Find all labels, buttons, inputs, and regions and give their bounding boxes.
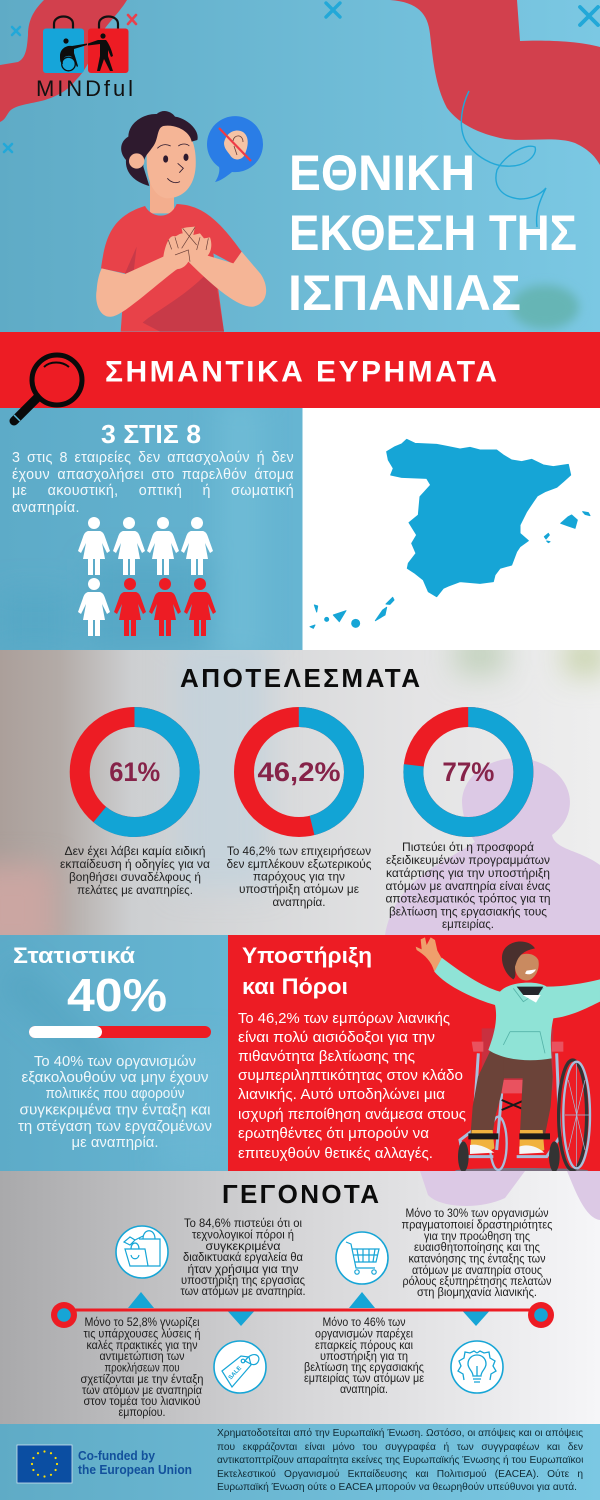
body text: είναι πολύ αισιόδοξοι για την [238,1029,435,1046]
caption: 77% [386,840,551,931]
caption: 46,2%: Το 46,2% των επιχειρήσεων [227,844,371,858]
caption: 77%: αποτελεσματικός τρόπος για τη [386,892,550,906]
decorative purple silhouette [420,1171,600,1220]
shirt [101,204,242,332]
icon: EU flag [17,1445,72,1483]
text: 30% [402,1208,553,1299]
decorative cross marks [4,3,598,152]
head [515,954,539,981]
heading: 3 ΣΤΙΣ 8 [101,419,201,449]
panel: support and resources [228,935,600,1173]
text: 84,6%: συγκεκριμένα [206,1241,281,1253]
body text [12,450,294,522]
disclaimer text: αντικατοπτρίζουν απαραίτητα εκείνες της Ευρωπαϊκής Ένωσης ή του Ευρωπαϊκού [217,1455,583,1466]
body text: πολιτικές που αφορούν [46,1086,184,1102]
disclaimer text: Χρηματοδοτείται από την Ευρωπαϊκή Ένωση. Ωστόσο, οι απόψεις και οι απόψεις [217,1428,583,1439]
co-funded label: Co-funded by [78,1449,155,1463]
text: 52,8%: εμπορίου. [118,1407,166,1419]
small wheels [458,1141,469,1172]
text: 84,6%: των ατόμων με αναπηρία. [180,1286,306,1298]
panel: map of Spain [302,408,600,650]
icon: speech bubble with crossed ear [207,116,263,182]
disclaimer text: Ευρωπαϊκή Ένωση ούτε ο EACEA μπορούν να θεωρηθούν υπεύθυνοι για αυτά. [217,1482,577,1493]
heading [242,943,372,999]
caption: 77%: κατάρτισης για την υποστήριξη [386,866,550,880]
caption: 61%: εκπαίδευση ή οδηγίες για να [60,857,210,871]
decorative curl line [461,91,546,227]
disclaimer text: Εκτελεστικού Οργανισμού Εκπαίδευσης και Πολιτισμού (EACEA). Ούτε η [217,1468,583,1480]
text: 84,6%: διαδικτυακά εργαλεία θα [183,1252,303,1264]
text: 30%: ατόμων με αναπηρία στους [412,1265,542,1277]
heading: και Πόροι [242,974,348,999]
body text: συμπεριληπτικότητας στον κλάδο [238,1067,463,1084]
progress bar [29,1026,211,1038]
panel: key findings banner [0,332,600,408]
body text: πιθανότητα βελτίωσης της [238,1048,415,1065]
text: 52,8%: αντιμετώπιση των [100,1351,185,1363]
disclaimer text [217,1427,583,1497]
text: 46%: υποστήριξη για τη [320,1351,408,1363]
body text: Το 46,2% των εμπόρων λιανικής [238,1010,450,1027]
body text: τη στέγαση των εργαζομένων [18,1119,212,1135]
text: 84,6%: Το 84,6% πιστεύει ότι οι [184,1218,302,1230]
big number: 40% [67,969,167,1021]
shoes [470,1130,544,1153]
text: 52,8%: προκλήσεων που [104,1362,180,1374]
disclaimer text: που εκφράζονται είναι μόνο του συγγραφέα ή των συγγραφέων και δεν [217,1442,583,1452]
text: 30%: Μόνο το 30% των οργανισμών [406,1208,549,1220]
icon: shopping cart [336,1232,388,1284]
title [288,145,577,321]
hand [416,937,442,972]
donut: 46,2% [244,717,354,827]
body text: επιτευχθούν θετικές αλλαγές. [238,1145,433,1162]
eyes and features [163,155,168,163]
caption: 77%: βελτίωση της εργασιακής τους [389,904,547,918]
body text: ερωτηθέντες ότι μπορούν να [238,1125,429,1142]
neck [150,180,174,213]
panel: results [0,635,600,955]
heading: Στατιστικά [13,943,136,968]
ear [129,153,144,169]
caption: 77%: Πιστεύει ότι η προσφορά [402,840,534,854]
body text: συγκεκριμένα την ένταξη και [20,1102,210,1118]
body text: Το 40% των οργανισμών [34,1054,196,1070]
title: ΕΘΝΙΚΗ [289,145,475,201]
caption: 61% [60,844,210,897]
map [310,439,590,628]
banner heading: ΣΗΜΑΝΤΙΚΑ ΕΥΡΗΜΑΤΑ [105,356,497,388]
text: 30%: για την προώθηση της [424,1231,530,1243]
right arm [188,252,266,307]
standing figure [88,33,113,71]
panel: facts timeline [0,1171,600,1424]
text: 46%: επαρκείς πόρους και [315,1340,413,1352]
donut: 61% [80,717,190,827]
text: 52,8%: στον τομέα του λιανικού [84,1396,200,1408]
text: 46%: εμπειρίας των ατόμων με [304,1373,424,1385]
heading: ΓΕΓΟΝΟΤΑ [222,1179,379,1209]
caption: 77%: εμπειρίας. [442,917,494,931]
text: 46% [304,1317,424,1396]
title: ΕΚΘΕΣΗ ΤΗΣ [289,205,577,261]
panel: statistics [0,935,230,1171]
body text: εξακολουθούν να μην έχουν [22,1070,208,1086]
face [147,125,196,198]
body text: έχουν απασχολήσει στο παρελθόν άτομα [12,467,294,483]
body text: ισχυρή πεποίθηση ανάμεσα στους [238,1106,466,1123]
caption: 77%: ατόμων με αναπηρία είναι ένας [386,879,551,893]
icon: sale tag [214,1341,266,1393]
caption: 46,2% [226,844,372,909]
text: 52,8%: τις υπάρχουσες λύσεις ή [84,1328,200,1340]
logo: MINDful [36,16,133,101]
body text: 3 στις 8 εταιρείες δεν απασχολούν ή δεν [12,450,294,466]
pictogram: eight figures, three red [78,517,216,636]
body text: με ακουστική, οπτική ή σωματική [12,483,294,499]
icon: shopping bags [116,1226,168,1278]
caption: 46,2%: δεν εμπλέκουν εξωτερικούς [226,857,372,871]
wheelchair back [482,1028,553,1090]
ground shadow [455,1168,588,1173]
wheelchair figure [60,38,87,71]
text: 46%: οργανισμών παρέχει [315,1328,413,1340]
panel: hero header [0,0,600,332]
body text: αναπηρία. [12,500,80,516]
co-funded label: the European Union [78,1463,192,1477]
red blob: top right [390,0,600,165]
co-funded label [78,1449,192,1477]
text: 84,6%: τεχνολογικοί πόροι ή [192,1230,294,1242]
heading: ΑΠΟΤΕΛΕΣΜΑΤΑ [180,663,420,693]
donut: 61%: 61% [109,757,160,787]
text: 84,6%: υποστήριξη της εργασίας [181,1275,305,1287]
text: 46%: βελτίωση της εργασιακής [304,1362,424,1374]
text: 30%: στη βιομηχανία λιανικής. [417,1287,537,1299]
red lock [88,28,128,73]
icon: magnifying glass [14,355,82,421]
panel: 3 in 8 statistic [0,400,302,660]
text: 30%: κατανόησης της ένταξης των [408,1254,546,1266]
wheelchair frame [460,1053,560,1157]
text: 52,8%: καλές πρακτικές για την [86,1340,198,1352]
text: 84,6% [180,1218,306,1298]
red blob: top left [0,0,127,122]
caption: 77%: εξειδικευμένων προγραμμάτων [386,853,550,867]
left arm [96,257,188,317]
heading: Υποστήριξη [242,943,372,968]
decorative purple silhouette [385,758,600,935]
text: 84,6%: ήταν χρήσιμα για την [188,1264,299,1276]
text: 46%: αναπηρία. [340,1384,388,1396]
panel: footer [0,1424,600,1500]
text: 52,8%: σχετίζονται με την ένταξη [80,1374,204,1386]
big wheel [559,1060,587,1170]
donut: 46,2%: 46,2% [258,757,340,787]
hair [121,111,198,186]
illustration: person in wheelchair [416,937,600,1173]
caption: 46,2%: αναπηρία. [272,895,326,909]
text: 52,8%: Μόνο το 52,8% γνωρίζει [84,1317,200,1329]
caption: 61%: πελάτες με αναπηρίες. [77,883,193,897]
body text [18,1054,212,1151]
icon: sale tag: SALE [228,1365,243,1381]
hoodie [434,958,600,1060]
body text: λιανικής. Αυτό υποδηλώνει μια [238,1086,445,1103]
donut: 77%: 77% [442,757,494,787]
caption: 46,2%: παρόχους για την [253,870,345,884]
text: 52,8% [80,1317,204,1419]
logo wordmark: MINDful [36,76,133,101]
icon: light bulb in gear [451,1341,503,1393]
body text: με αναπηρία. [72,1135,158,1151]
title: ΙΣΠΑΝΙΑΣ [288,265,521,321]
hands [163,227,211,269]
decorative green glow [511,285,579,329]
blue lock [43,28,84,73]
text: 52,8%: των ατόμων με αναπηρία [82,1385,202,1397]
illustration: person signing [96,111,266,332]
lock handles [54,16,118,29]
shirt shadow [125,247,224,332]
text: 46%: Μόνο το 46% των [322,1317,406,1329]
donut: 77% [413,717,523,827]
text: 30%: ευαισθητοποίησης και της [414,1242,540,1254]
shirt collar [523,995,541,1003]
caption: 46,2%: υποστήριξη ατόμων με [239,882,360,896]
caption: 61%: βοηθήσει συναδέλφους ή [69,870,201,884]
timeline [51,1292,554,1328]
trousers [471,1050,553,1133]
text: 30%: πραγματοποιεί δραστηριότητες [402,1220,553,1232]
body text [238,1010,466,1162]
caption: 61%: Δεν έχει λάβει καμία ειδική [64,844,206,858]
text: 30%: ρόλους εξυπηρέτησης πελατών [402,1276,552,1288]
